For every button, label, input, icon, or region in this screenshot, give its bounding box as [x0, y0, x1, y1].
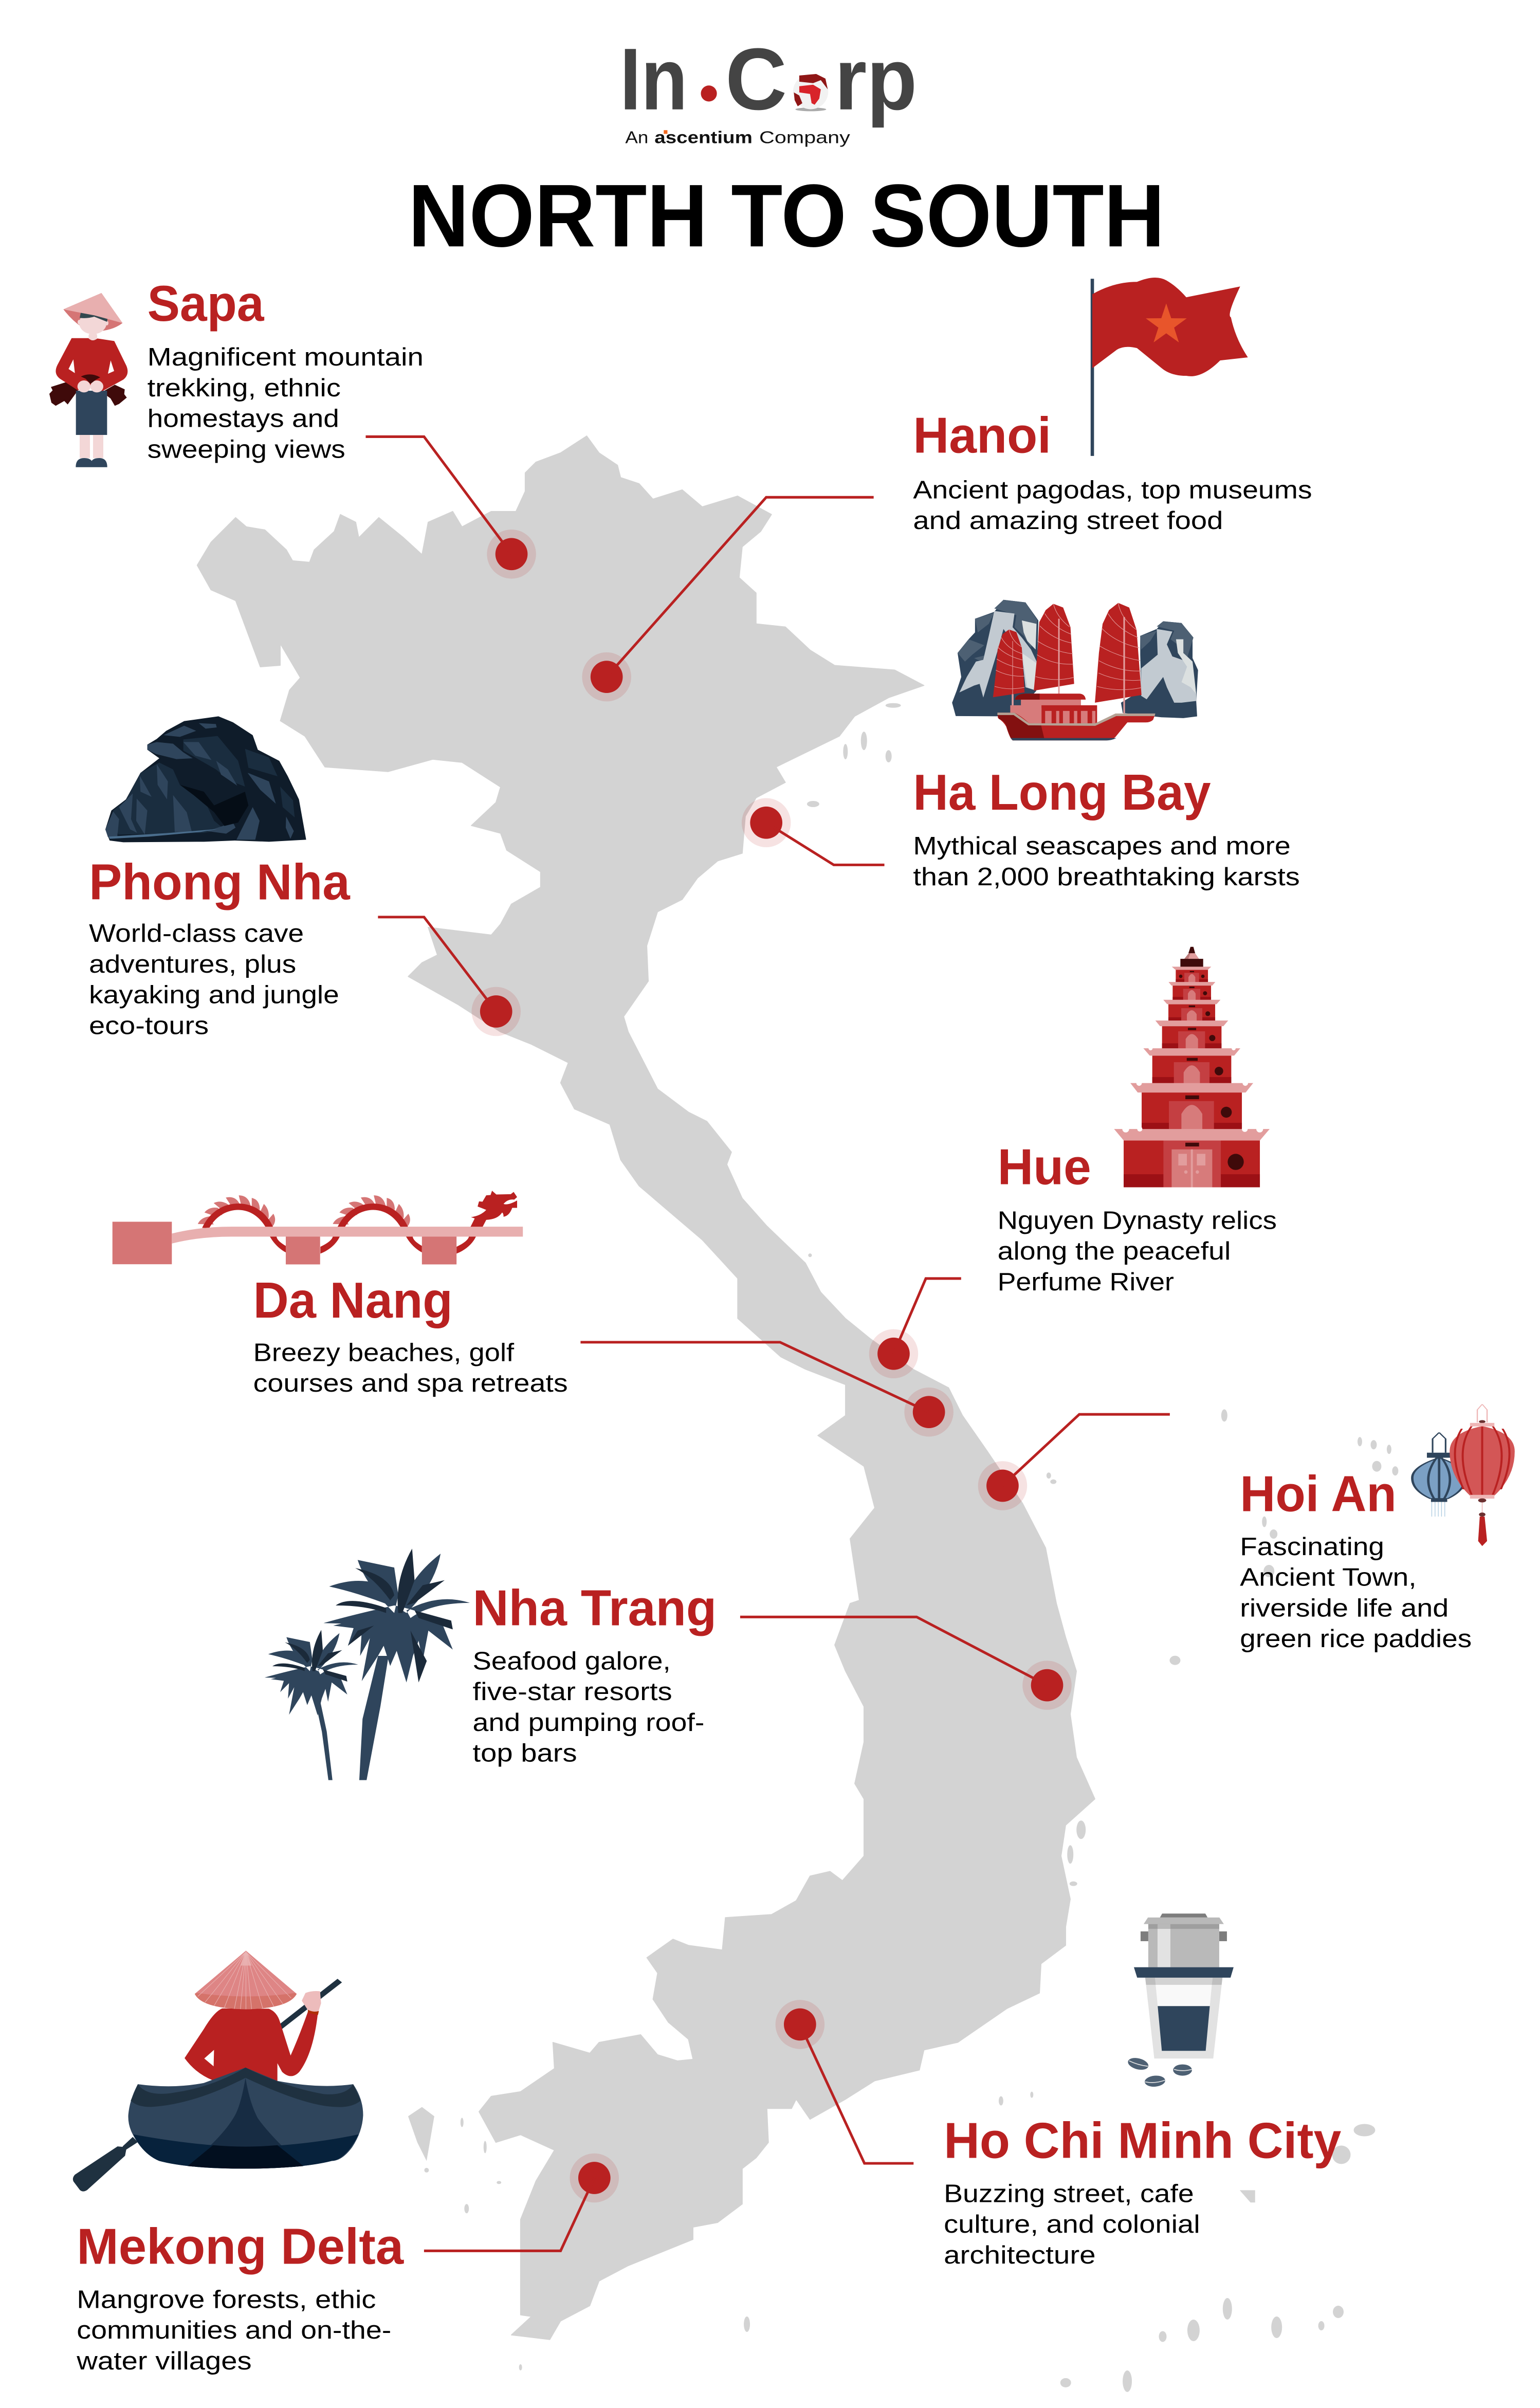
heading: Mekong Delta	[77, 2218, 404, 2275]
panel: Mekong Delta	[73, 1950, 619, 2375]
description: Breezy beaches, golf	[253, 1338, 514, 1366]
connector	[365, 436, 511, 554]
description: Magnificent mountain	[148, 342, 424, 371]
description: trekking, ethnic	[148, 373, 341, 402]
description: along the peaceful	[998, 1236, 1231, 1265]
description: eco-tours	[89, 1011, 209, 1039]
description	[253, 1338, 568, 1397]
description: Nguyen Dynasty relics	[998, 1206, 1277, 1235]
description: Mangrove forests, ethic	[77, 2285, 376, 2313]
connector	[1002, 1414, 1170, 1486]
heading: Sapa	[148, 275, 265, 332]
description: Perfume River	[998, 1267, 1174, 1296]
icon: cave	[105, 716, 306, 842]
connector	[580, 1342, 929, 1412]
logo: C	[725, 30, 787, 129]
connector	[766, 823, 885, 865]
heading: Hue	[998, 1138, 1091, 1195]
description: Buzzing street, cafe	[944, 2179, 1194, 2208]
icon: pagoda	[1114, 947, 1270, 1187]
panel: Da Nang	[113, 1191, 954, 1436]
logo: An	[625, 128, 648, 147]
pin	[471, 987, 521, 1036]
pin	[869, 1329, 918, 1378]
icon: lanterns	[1412, 1404, 1515, 1546]
description	[998, 1206, 1277, 1296]
description: adventures, plus	[89, 950, 296, 978]
description: Mythical seascapes and more	[913, 831, 1291, 860]
icon: woman in conical hat	[49, 293, 127, 467]
heading: Hoi An	[1240, 1465, 1397, 1522]
title: NORTH TO SOUTH	[408, 166, 1165, 265]
pin	[978, 1461, 1027, 1510]
description: communities and on-the-	[77, 2315, 391, 2344]
description: water villages	[76, 2346, 252, 2375]
description: five-star resorts	[473, 1677, 672, 1706]
icon: dragon bridge	[113, 1191, 523, 1265]
logo: Company	[759, 128, 850, 147]
description: World-class cave	[89, 919, 304, 947]
description: Ancient pagodas, top museums	[913, 475, 1312, 504]
description: kayaking and jungle	[89, 980, 339, 1009]
pin	[487, 530, 536, 579]
description: homestays and	[148, 404, 339, 433]
description: Seafood galore,	[473, 1646, 671, 1675]
description: riverside life and	[1240, 1593, 1449, 1622]
panel: Phong Nha	[89, 716, 521, 1039]
map of Vietnam	[197, 436, 1398, 2392]
pin	[570, 2154, 619, 2202]
connector	[893, 1279, 961, 1354]
heading: Ho Chi Minh City	[944, 2112, 1342, 2169]
description: architecture	[944, 2240, 1096, 2269]
icon: palm trees	[265, 1548, 470, 1780]
panel: Ha Long Bay	[742, 600, 1300, 891]
heading: Hanoi	[913, 407, 1051, 464]
panel: Hue	[869, 947, 1277, 1378]
description	[89, 919, 339, 1039]
pin	[742, 798, 791, 847]
description: sweeping views	[148, 434, 345, 463]
heading: Nha Trang	[473, 1580, 717, 1636]
icon: phin coffee	[1127, 1913, 1234, 2088]
panel: Sapa	[49, 275, 536, 579]
logo: In	[620, 30, 688, 129]
connector	[607, 497, 874, 677]
heading: Da Nang	[253, 1272, 453, 1328]
panel: Hoi An	[978, 1404, 1515, 1653]
description	[944, 2179, 1200, 2269]
pin	[776, 2000, 824, 2049]
logo: rp	[835, 30, 917, 129]
connector	[740, 1617, 1047, 1685]
pin	[1022, 1661, 1072, 1710]
connector	[378, 917, 496, 1011]
description: top bars	[473, 1739, 577, 1767]
heading: Phong Nha	[89, 854, 351, 910]
description: and amazing street food	[913, 506, 1223, 535]
description: courses and spa retreats	[253, 1369, 568, 1397]
icon: Vietnamese flag	[1092, 278, 1248, 456]
logo: ascentium	[654, 128, 753, 147]
heading: Ha Long Bay	[913, 764, 1211, 820]
description: culture, and colonial	[944, 2210, 1200, 2238]
description	[913, 831, 1300, 891]
connector	[800, 2024, 913, 2163]
pin	[904, 1388, 954, 1436]
description: Fascinating	[1240, 1532, 1384, 1561]
icon: rower in boat	[73, 1950, 363, 2192]
description	[1240, 1532, 1472, 1653]
description: and pumping roof-	[473, 1708, 704, 1737]
logo	[620, 30, 917, 147]
panel: Hanoi	[582, 278, 1312, 701]
description	[76, 2285, 391, 2375]
description	[913, 475, 1312, 535]
description	[148, 342, 424, 463]
pin	[582, 652, 631, 701]
description: than 2,000 breathtaking karsts	[913, 862, 1300, 891]
description	[473, 1646, 704, 1767]
description: green rice paddies	[1240, 1624, 1472, 1653]
icon: junk boat and karsts	[952, 600, 1198, 740]
description: Ancient Town,	[1240, 1563, 1417, 1592]
connector	[424, 2178, 594, 2251]
panel: Nha Trang	[265, 1548, 1072, 1780]
panel: Ho Chi Minh City	[776, 1913, 1342, 2269]
